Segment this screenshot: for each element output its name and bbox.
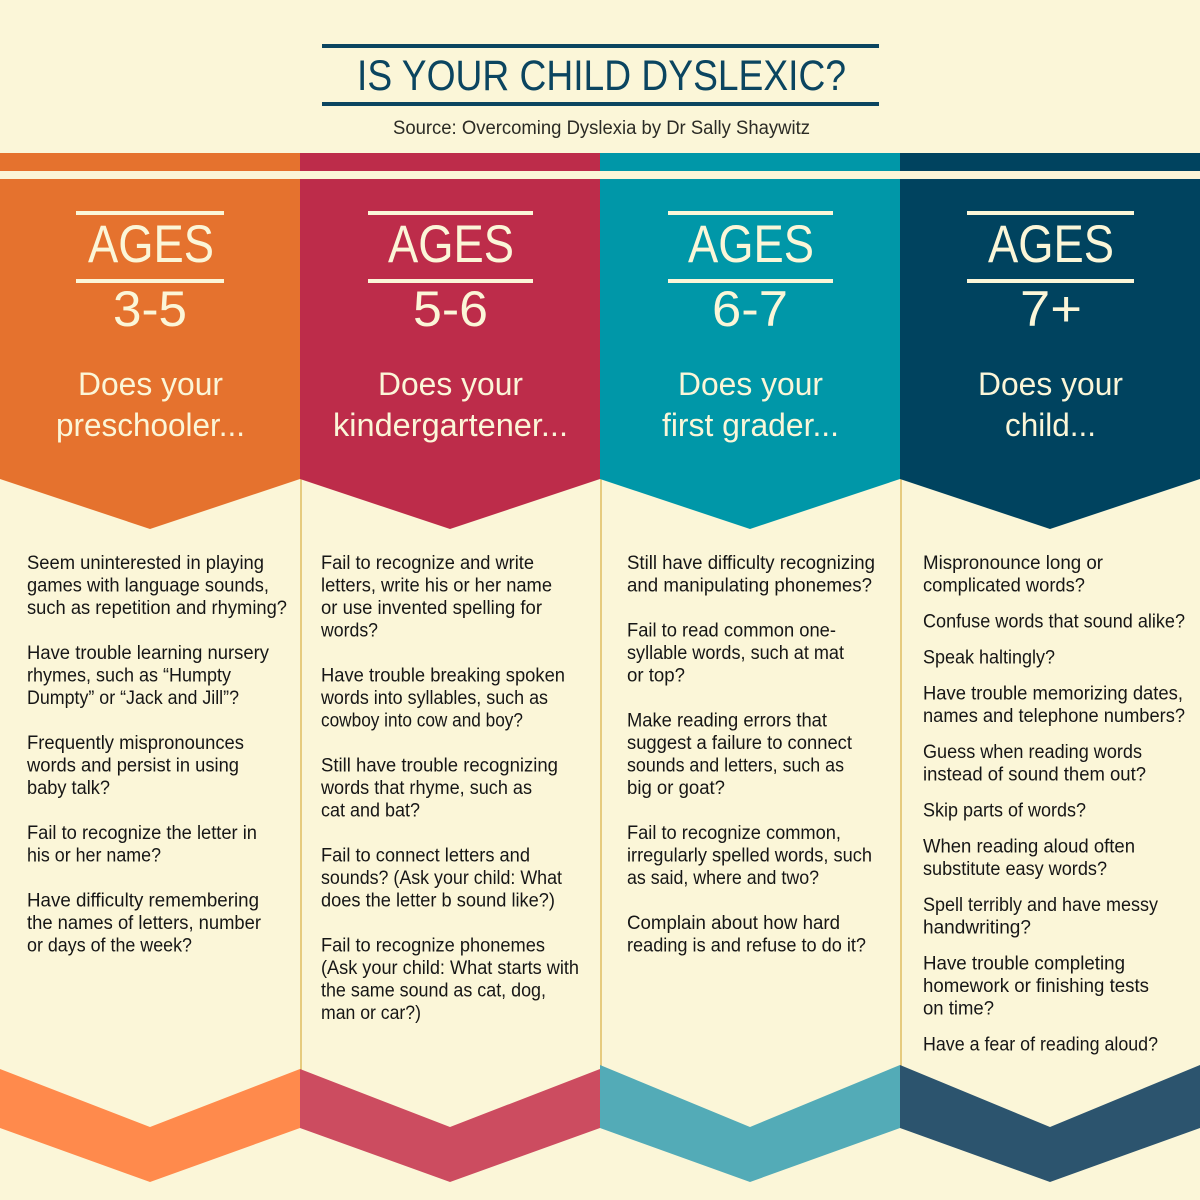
heading: ages 7+: child... xyxy=(1005,407,1096,443)
footer chevron: ages 3-5 xyxy=(0,1069,300,1182)
symptom list: ages 3-5: the names of letters, number xyxy=(27,913,262,934)
symptom list: ages 6-7: syllable words, such at mat xyxy=(627,643,845,664)
symptom list: ages 5-6: cowboy into cow and boy? xyxy=(321,710,523,732)
symptom list: ages 7+: Mispronounce long or xyxy=(923,553,1104,574)
symptom list: ages 5-6: words that rhyme, such as xyxy=(320,778,532,799)
symptom list: ages 3-5: or days of the week? xyxy=(27,936,192,956)
heading: ages 3-5 xyxy=(56,211,245,443)
symptom list: ages 7+: Spell terribly and have messy xyxy=(923,895,1158,916)
symptom list: ages 5-6: Fail to connect letters and xyxy=(321,846,530,866)
banner: ages 5-6 xyxy=(300,179,600,529)
heading: ages 3-5: 3-5 xyxy=(113,281,187,337)
symptom list: ages 5-6 xyxy=(320,553,579,1024)
symptom list: ages 6-7: and manipulating phonemes? xyxy=(627,576,872,596)
symptom list: ages 5-6: Have trouble breaking spoken xyxy=(321,666,565,686)
symptom list: ages 6-7: Fail to recognize common, xyxy=(627,823,841,844)
symptom list: ages 6-7: Complain about how hard xyxy=(627,913,840,934)
symptom list: ages 7+: Skip parts of words? xyxy=(923,800,1086,822)
symptom list: ages 3-5: his or her name? xyxy=(27,846,161,866)
symptom list: ages 6-7: Make reading errors that xyxy=(627,710,828,732)
heading: ages 7+: 7+ xyxy=(1020,281,1082,337)
heading: ages 6-7: Does your xyxy=(678,366,823,402)
symptom list: ages 7+: names and telephone numbers? xyxy=(923,706,1185,727)
symptom list: ages 5-6: sounds? (Ask your child: What xyxy=(321,868,563,889)
symptom list: ages 6-7: sounds and letters, such as xyxy=(627,756,844,776)
symptom list: ages 6-7: or top? xyxy=(627,666,685,686)
symptom list: ages 5-6: the same sound as cat, dog, xyxy=(321,980,546,1002)
symptom list: ages 5-6: Still have trouble recognizing xyxy=(321,756,558,776)
symptom list: ages 6-7: Still have difficulty recognizing xyxy=(627,553,875,574)
title: IS YOUR CHILD DYSLEXIC? xyxy=(357,52,846,100)
panel: ages 7+ xyxy=(900,153,1200,1182)
heading: ages 6-7 xyxy=(662,211,839,443)
banner: ages 7+ xyxy=(900,179,1200,529)
heading: ages 6-7: 6-7 xyxy=(712,281,788,337)
symptom list: ages 7+ xyxy=(923,553,1185,1056)
heading: ages 6-7: first grader... xyxy=(662,407,839,443)
symptom list: ages 7+: Speak haltingly? xyxy=(923,648,1055,668)
footer chevron: ages 7+ xyxy=(900,1065,1200,1182)
source line: Source: Overcoming Dyslexia by Dr Sally Shaywitz xyxy=(393,118,810,139)
symptom list: ages 3-5: Have difficulty remembering xyxy=(27,890,259,912)
panel: ages 5-6 xyxy=(300,153,600,1182)
symptom list: ages 5-6: letters, write his or her name xyxy=(321,576,552,596)
symptom list: ages 7+: Guess when reading words xyxy=(923,742,1142,763)
banner: ages 3-5 xyxy=(0,179,300,529)
heading: ages 3-5: AGES xyxy=(88,215,214,274)
symptom list: ages 3-5: Seem uninterested in playing xyxy=(27,553,264,574)
footer chevron: ages 6-7 xyxy=(600,1065,900,1182)
panel: ages 6-7 xyxy=(600,153,900,1182)
symptom list: ages 7+: Have a fear of reading aloud? xyxy=(923,1034,1158,1056)
heading: ages 6-7: AGES xyxy=(688,215,814,274)
heading: ages 3-5: preschooler... xyxy=(56,407,245,443)
symptom list: ages 7+: substitute easy words? xyxy=(923,859,1107,880)
symptom list: ages 5-6: words into syllables, such as xyxy=(320,688,548,709)
heading: ages 7+ xyxy=(967,211,1134,443)
symptom list: ages 3-5: such as repetition and rhyming? xyxy=(27,598,287,619)
symptom list: ages 7+: complicated words? xyxy=(923,576,1085,596)
symptom list: ages 3-5: rhymes, such as “Humpty xyxy=(27,666,231,686)
symptom list: ages 3-5: Have trouble learning nursery xyxy=(27,643,269,664)
heading: ages 5-6: Does your xyxy=(378,366,523,402)
heading: ages 5-6: AGES xyxy=(388,215,514,274)
heading: ages 3-5: Does your xyxy=(78,366,223,402)
symptom list: ages 3-5: Frequently mispronounces xyxy=(27,733,244,754)
footer chevron: ages 5-6 xyxy=(300,1069,600,1182)
heading: ages 7+: AGES xyxy=(988,215,1114,274)
symptom list: ages 7+: Have trouble completing xyxy=(923,954,1125,974)
banner: ages 6-7 xyxy=(600,179,900,529)
symptom list: ages 6-7: irregularly spelled words, such xyxy=(627,846,872,866)
symptom list: ages 3-5: Dumpty” or “Jack and Jill”? xyxy=(27,688,239,709)
symptom list: ages 5-6: words? xyxy=(320,620,378,642)
symptom list: ages 7+: homework or finishing tests xyxy=(923,976,1149,997)
symptom list: ages 6-7: big or goat? xyxy=(627,778,725,799)
symptom list: ages 7+: Have trouble memorizing dates, xyxy=(923,684,1183,704)
symptom list: ages 5-6: Fail to recognize phonemes xyxy=(321,936,545,956)
symptom list: ages 7+: Confuse words that sound alike? xyxy=(923,612,1185,632)
symptom list: ages 7+: instead of sound them out? xyxy=(923,764,1146,786)
panel: ages 3-5 xyxy=(0,153,300,1182)
symptom list: ages 5-6: (Ask your child: What starts with xyxy=(321,958,579,979)
heading: ages 7+: Does your xyxy=(978,366,1123,402)
symptom list: ages 6-7: suggest a failure to connect xyxy=(627,733,853,754)
symptom list: ages 5-6: man or car?) xyxy=(321,1003,421,1024)
symptom list: ages 5-6: cat and bat? xyxy=(321,800,420,822)
symptom list: ages 5-6: or use invented spelling for xyxy=(321,598,543,619)
symptom list: ages 7+: on time? xyxy=(923,998,994,1020)
symptom list: ages 3-5 xyxy=(26,553,287,956)
symptom list: ages 6-7 xyxy=(627,553,875,956)
symptom list: ages 3-5: words and persist in using xyxy=(26,756,239,776)
symptom list: ages 7+: handwriting? xyxy=(923,918,1031,938)
symptom list: ages 3-5: games with language sounds, xyxy=(27,576,269,596)
heading: ages 5-6: kindergartener... xyxy=(333,407,568,443)
title block xyxy=(322,44,879,139)
heading: ages 5-6: 5-6 xyxy=(413,281,488,337)
symptom list: ages 5-6: Fail to recognize and write xyxy=(321,553,534,574)
symptom list: ages 6-7: Fail to read common one- xyxy=(627,620,836,642)
symptom list: ages 3-5: Fail to recognize the letter in xyxy=(27,823,257,844)
symptom list: ages 3-5: baby talk? xyxy=(27,778,110,799)
symptom list: ages 6-7: as said, where and two? xyxy=(627,868,819,889)
symptom list: ages 5-6: does the letter b sound like?) xyxy=(321,890,555,912)
symptom list: ages 6-7: reading is and refuse to do it? xyxy=(627,936,866,956)
symptom list: ages 7+: When reading aloud often xyxy=(923,836,1135,858)
heading: ages 5-6 xyxy=(333,211,568,443)
